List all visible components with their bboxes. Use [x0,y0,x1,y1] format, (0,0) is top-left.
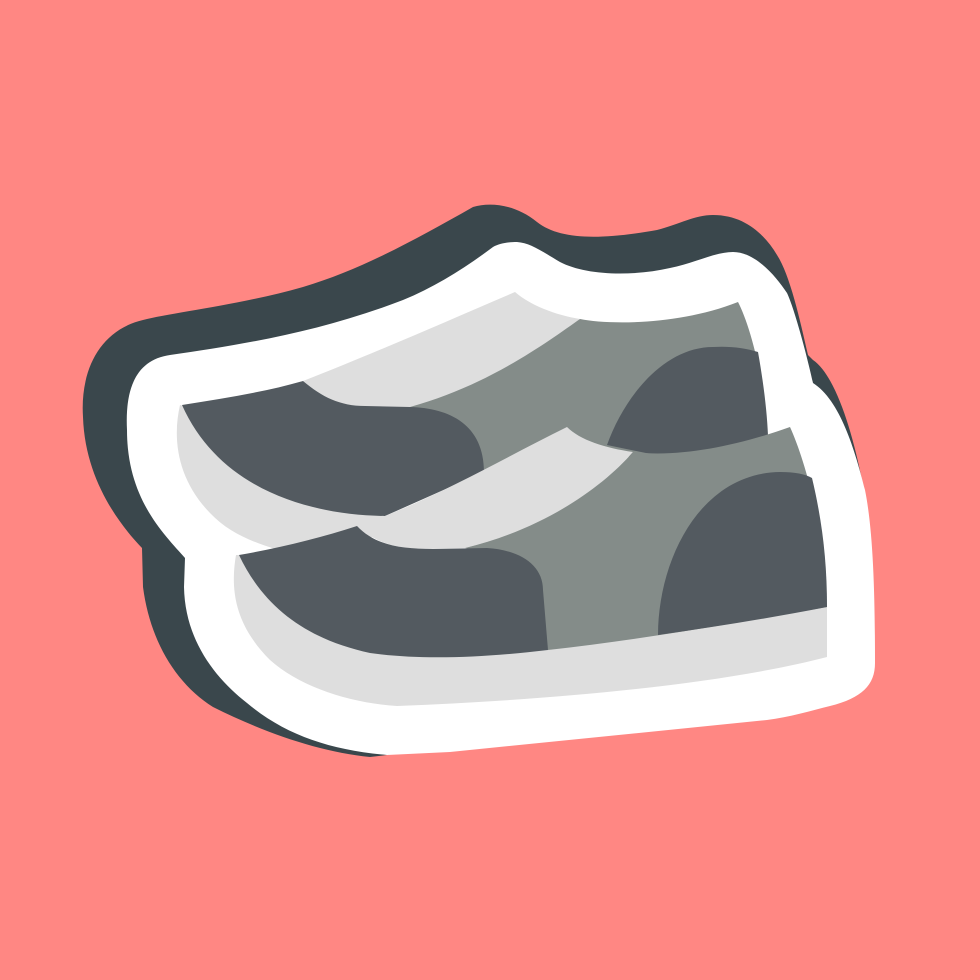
front shoe heel patch [658,472,827,635]
back shoe sole [177,405,385,560]
back shoe toe cap [182,381,484,516]
front shoe [234,427,827,706]
front shoe sole [234,555,827,706]
front shoe toe cap [239,526,548,657]
back shoe upper [410,302,768,475]
front shoe tongue band [357,427,633,549]
front shoe upper [465,427,827,650]
back shoe heel patch [607,347,768,460]
back shoe [177,292,768,560]
sticker shadow [83,205,862,757]
white sticker outline [127,242,875,755]
back shoe tongue band [303,292,580,420]
